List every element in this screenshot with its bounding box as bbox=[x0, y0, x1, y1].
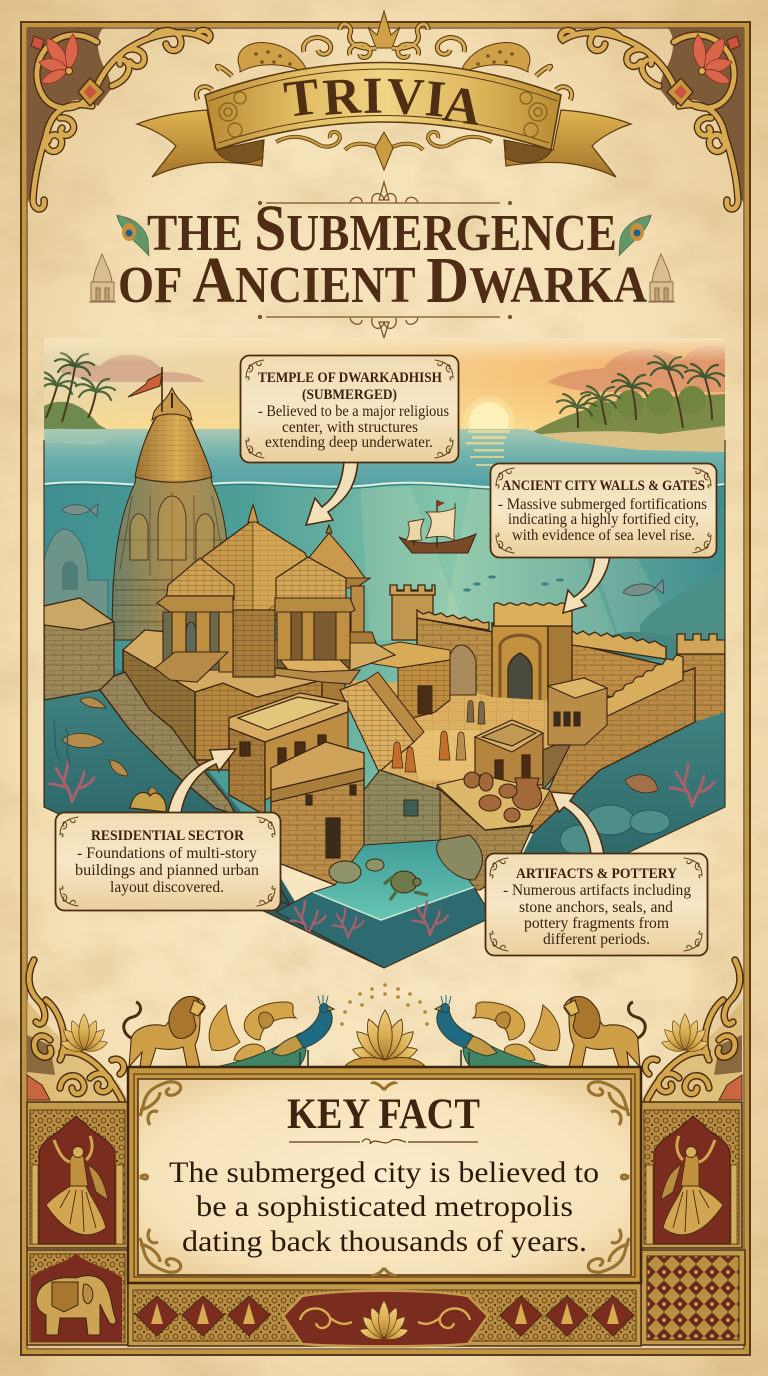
left foliage bbox=[209, 1002, 296, 1062]
panel: key fact bbox=[128, 1067, 641, 1283]
small shrine bbox=[371, 642, 476, 718]
panel: lattice bbox=[641, 1250, 745, 1345]
banner label: TRIVIA bbox=[281, 67, 485, 137]
title bbox=[118, 192, 647, 317]
dancer figure bbox=[46, 1136, 108, 1235]
callout: artifacts and pottery: pottery fragments from bbox=[524, 915, 669, 932]
top-right corner ornament bbox=[561, 27, 744, 209]
grand staircase bbox=[340, 672, 424, 772]
front earth wedge bbox=[276, 887, 500, 968]
main temple terrace bbox=[123, 630, 395, 770]
filigree under banner bbox=[276, 132, 492, 150]
sea surface bbox=[44, 429, 725, 490]
rear tower bbox=[390, 585, 435, 640]
roof bbox=[229, 693, 348, 742]
lower corner scrolls left bbox=[27, 960, 128, 1102]
banner ribbon bbox=[137, 62, 631, 177]
left peacock bbox=[216, 995, 334, 1067]
panel: bottom ornamental band bbox=[128, 1283, 641, 1346]
callout: ancient city walls and gates: with evidence of sea level rise. bbox=[512, 527, 695, 544]
callout: residential sector: - Foundations of multi-story bbox=[77, 845, 257, 862]
icon: peacock feather right bbox=[619, 215, 652, 256]
top fade into parchment bbox=[44, 338, 725, 362]
callout: temple of Dwarkadhish: extending deep underwater. bbox=[265, 434, 433, 451]
callout: artifacts and pottery bbox=[486, 792, 708, 956]
small house bbox=[475, 720, 570, 790]
title: THE SUBMERGENCE bbox=[147, 192, 617, 265]
right foliage bbox=[473, 1002, 560, 1062]
right front wall bbox=[520, 655, 695, 833]
ship bbox=[399, 500, 476, 553]
title: OF ANCIENT DWARKA bbox=[118, 244, 647, 317]
seabed right bbox=[523, 712, 725, 853]
panel: right dancer bbox=[641, 1102, 742, 1248]
left dome bbox=[157, 558, 234, 612]
callout: residential sector: buildings and pianned urban bbox=[75, 862, 259, 879]
right portico bbox=[275, 612, 360, 684]
callout: residential sector: layout discovered. bbox=[110, 879, 224, 896]
sunset sky bbox=[44, 341, 725, 431]
artifacts and pottery platform bbox=[437, 772, 550, 890]
seabed left bbox=[114, 669, 369, 961]
underwater gradient bbox=[44, 482, 725, 830]
title ornament bottom bbox=[258, 316, 512, 338]
key fact body: dating back thousands of years. bbox=[182, 1225, 587, 1258]
background temple spire bbox=[112, 367, 232, 640]
heading divider bbox=[289, 1139, 478, 1144]
callout: temple of Dwarkadhish bbox=[240, 356, 458, 525]
pottery bbox=[464, 772, 542, 822]
city gate bbox=[492, 603, 572, 703]
frieze: lions, peacocks and lotus bbox=[124, 983, 645, 1067]
lower corner scrolls right bbox=[641, 960, 742, 1102]
callout: temple of Dwarkadhish: - Believed to be a major religious bbox=[258, 403, 449, 420]
icon: temple left bbox=[89, 254, 116, 302]
key fact body bbox=[169, 1156, 599, 1258]
callout: artifacts and pottery: stone anchors, seals, and bbox=[519, 899, 673, 916]
callout: residential sector: RESIDENTIAL SECTOR bbox=[91, 828, 244, 844]
icon: temple right bbox=[648, 254, 675, 302]
sunken pool bbox=[313, 770, 482, 920]
key fact body: be a sophisticated metropolis bbox=[196, 1190, 573, 1223]
callout: ancient city walls and gates bbox=[490, 464, 716, 613]
top-left corner ornament bbox=[27, 27, 210, 209]
right palm island bbox=[526, 356, 725, 452]
main ribbon bbox=[205, 62, 561, 150]
central tower bbox=[202, 504, 308, 678]
arrow: to pottery bbox=[551, 792, 604, 854]
key fact heading: KEY FACT bbox=[287, 1091, 480, 1138]
callout: temple of Dwarkadhish: center, with structures bbox=[282, 419, 418, 436]
left foundation block bbox=[44, 598, 290, 905]
upper faces bbox=[229, 728, 265, 815]
arrow: to gate bbox=[563, 556, 610, 613]
title ornament top bbox=[258, 182, 512, 204]
callout: artifacts and pottery: ARTIFACTS & POTTERY bbox=[516, 866, 677, 882]
left lion bbox=[124, 996, 205, 1067]
callout: temple of Dwarkadhish: (SUBMERGED) bbox=[302, 387, 397, 403]
people bbox=[392, 700, 485, 772]
right wall bbox=[572, 646, 662, 696]
main temple bbox=[155, 505, 376, 684]
plaza floor bbox=[346, 680, 552, 793]
square gate annex bbox=[548, 678, 607, 745]
callout: ancient city walls and gates: ANCIENT CITY WALLS & GATES bbox=[502, 478, 705, 494]
lower block bbox=[271, 742, 364, 885]
panel: elephant bbox=[27, 1250, 128, 1345]
corner filigree bbox=[140, 1082, 629, 1275]
left palm island bbox=[44, 352, 116, 429]
distant ruin and fish bbox=[44, 504, 725, 660]
right ribbon tail bbox=[504, 110, 631, 177]
scene outline bbox=[44, 440, 725, 968]
right peacock bbox=[435, 995, 553, 1067]
arrow: to temple bbox=[306, 461, 358, 525]
key fact body: The submerged city is believed to bbox=[169, 1156, 599, 1189]
far right spire bbox=[309, 524, 377, 644]
city walls and gate bbox=[390, 585, 725, 722]
left ribbon tail bbox=[137, 110, 264, 177]
callout: temple of Dwarkadhish: TEMPLE OF DWARKADHISH bbox=[258, 370, 442, 386]
left portico bbox=[155, 612, 233, 682]
left wall bbox=[417, 618, 493, 700]
callout: ancient city walls and gates: - Massive submerged fortifications bbox=[498, 496, 707, 513]
right lion bbox=[564, 996, 645, 1067]
callout: artifacts and pottery: different periods. bbox=[543, 931, 650, 948]
callout: residential sector bbox=[56, 749, 280, 910]
icon: peacock feather left bbox=[116, 215, 149, 256]
filigree crest above banner bbox=[196, 11, 572, 100]
arrow: to residential building bbox=[168, 749, 236, 813]
residential building bbox=[229, 693, 364, 885]
callout: ancient city walls and gates: indicating a highly fortified city, bbox=[508, 511, 699, 528]
right dome bbox=[275, 557, 355, 615]
panel: left dancer bbox=[27, 1102, 128, 1248]
elephant figure bbox=[36, 1276, 116, 1335]
lotus and sparkle dots bbox=[340, 983, 429, 1066]
corner tower bbox=[677, 634, 725, 722]
turtle bbox=[384, 871, 428, 900]
callout: artifacts and pottery: - Numerous artifacts including bbox=[503, 882, 691, 899]
illustrated scene: submerged city bbox=[37, 335, 725, 968]
